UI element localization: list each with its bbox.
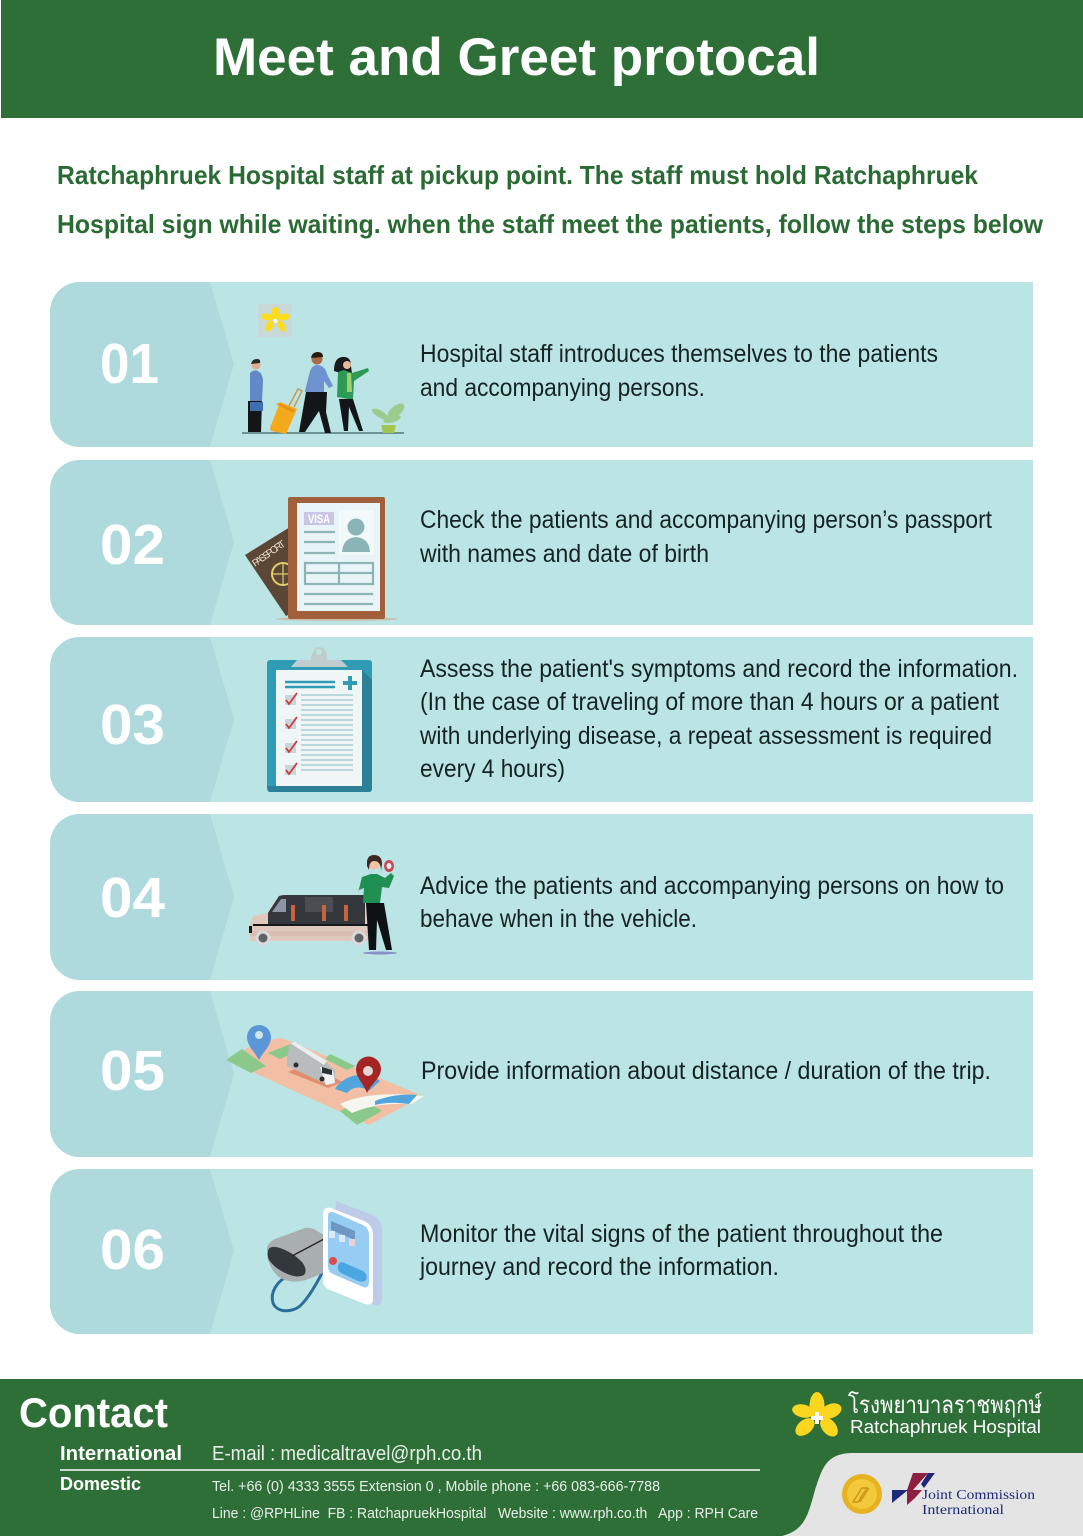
text: step 01: Hospital staff introduces themselves to the patients [420, 340, 938, 368]
text: step 04: behave when in the vehicle. [420, 905, 697, 933]
text: step 04: Advice the patients and accompanying persons on how to [420, 872, 1004, 900]
contact: international: International [60, 1443, 182, 1465]
number 06: 06 [100, 1218, 165, 1282]
intro text: Ratchaphruek Hospital staff at pickup point. The staff must hold Ratchaphruek [57, 160, 978, 190]
icon: van and guide [249, 855, 397, 954]
contact: international: E-mail : medicaltravel@rph.co.th [212, 1443, 482, 1465]
icon: visa and passport [245, 497, 399, 621]
number 05: 05 [100, 1039, 165, 1103]
text: step 02: Check the patients and accompanying person’s passport [420, 506, 992, 534]
text: step 01 [420, 340, 938, 402]
icon: blood pressure monitor [267, 1201, 382, 1311]
panel: step 04 [50, 814, 1033, 980]
panel: contact footer [0, 1379, 1083, 1536]
panel: step 01 [50, 282, 1033, 447]
contact: domestic [60, 1474, 758, 1522]
icon: staff greeting travellers [242, 304, 407, 434]
icon: JCI gold seal [842, 1474, 882, 1514]
logo: Joint Commission International: International [922, 1503, 1004, 1518]
icon: map route with van [226, 1025, 424, 1125]
panel: step 06 [50, 1169, 1033, 1334]
panel: step 05 [50, 991, 1033, 1157]
text: step 02: with names and date of birth [419, 540, 709, 568]
text: step 02 [419, 506, 992, 568]
logo: Ratchaphruek Hospital: Ratchaphruek Hospital [850, 1417, 1041, 1437]
number 02: 02 [100, 513, 165, 577]
icon: visa and passport: PASSPORT [250, 539, 288, 569]
text: step 03: with underlying disease, a repeat assessment is required [419, 722, 992, 750]
logo: Joint Commission International [892, 1473, 1035, 1518]
text: step 03 [419, 655, 1018, 783]
text: step 03: (In the case of traveling of more than 4 hours or a patient [420, 688, 999, 716]
number 01: 01 [100, 332, 159, 396]
number 04: 04 [100, 866, 165, 930]
logo: Joint Commission International: Joint Commission [922, 1488, 1035, 1503]
logo: Ratchaphruek Hospital [791, 1391, 1042, 1440]
text: step 04 [420, 872, 1004, 933]
panel: step 03 [50, 637, 1033, 802]
title banner [1, 0, 1083, 118]
contact: international [60, 1443, 482, 1465]
intro text: Hospital sign while waiting. when the staff meet the patients, follow the steps below [57, 209, 1044, 239]
heading: contact: Contact [19, 1389, 168, 1436]
text: step 03: Assess the patient's symptoms and record the information. [420, 655, 1018, 683]
text: step 01: and accompanying persons. [420, 374, 705, 402]
contact: domestic: Tel. +66 (0) 4333 3555 Extension 0 , Mobile phone : +66 083-666-7788 [212, 1479, 660, 1495]
panel: step 02 [50, 460, 1033, 625]
icon: visa and passport: VISA [308, 512, 330, 526]
intro text [57, 160, 1044, 239]
icon: clipboard checklist [267, 647, 372, 792]
traveller with suitcase [270, 352, 333, 434]
text: step 06: Monitor the vital signs of the patient throughout the [420, 1220, 943, 1248]
staff member [334, 357, 369, 431]
contact: domestic: Domestic [60, 1474, 141, 1494]
text: step 06: journey and record the information. [419, 1253, 779, 1281]
logo: Ratchaphruek Hospital: โรงพยาบาลราชพฤกษ์ [848, 1391, 1042, 1419]
panel: accreditation [782, 1453, 1083, 1536]
text: step 06 [419, 1220, 943, 1281]
traveller with briefcase [248, 359, 263, 432]
text: step 03: every 4 hours) [420, 755, 565, 783]
text: step 05: Provide information about distance / duration of the trip. [421, 1057, 991, 1085]
contact: domestic: Line : @RPHLine FB : RatchapruekHospital Website : www.rph.co.th App : RPH Care [212, 1506, 758, 1522]
title banner: Meet and Greet protocal [213, 28, 820, 87]
number 03: 03 [100, 693, 165, 757]
